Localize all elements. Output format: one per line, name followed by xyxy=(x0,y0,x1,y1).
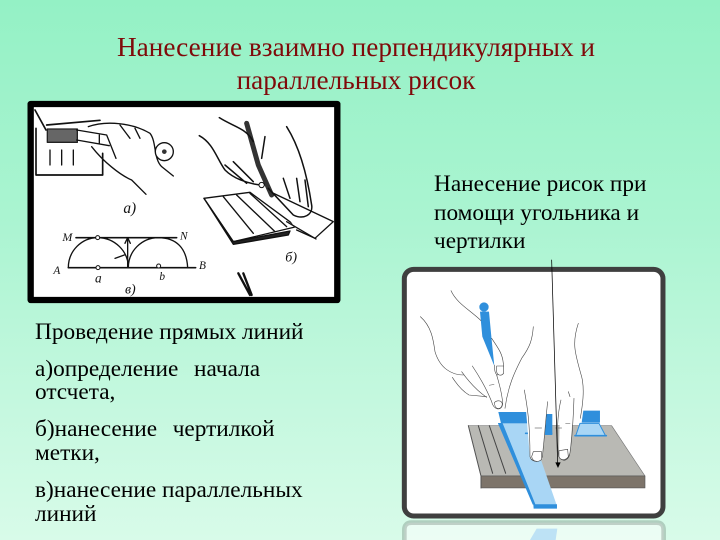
title: параллельных рисок xyxy=(237,65,475,95)
reflected ruler xyxy=(530,529,557,540)
illustration v: geometric construction: в) xyxy=(125,283,136,298)
text: straight line steps: линий xyxy=(35,501,96,527)
rounded frame xyxy=(404,269,663,516)
square tool xyxy=(498,411,606,509)
text: straight line steps: б)нанесение чертилкой xyxy=(35,416,275,442)
illustration v: geometric construction: M xyxy=(61,230,73,244)
illustration v: geometric construction: б) xyxy=(285,251,297,266)
text: scriber caption: помощи угольника и xyxy=(434,200,639,226)
illustration v: geometric construction: N xyxy=(179,231,189,243)
text: straight line steps xyxy=(35,319,304,527)
text: scriber caption xyxy=(434,171,646,254)
illustration a: hand with ruler xyxy=(35,110,173,194)
scriber xyxy=(479,302,494,366)
hands xyxy=(420,291,583,461)
illustration v: geometric construction: а) xyxy=(123,200,136,217)
title xyxy=(117,32,595,95)
text: straight line steps: отсчета, xyxy=(35,379,115,405)
text: scriber caption: Нанесение рисок при xyxy=(434,171,646,197)
text: scriber caption: чертилки xyxy=(434,228,525,254)
text: straight line steps: Проведение прямых линий xyxy=(35,319,304,345)
illustration v: geometric construction: B xyxy=(199,260,206,272)
board xyxy=(468,426,645,488)
illustration b: hands with scriber on board xyxy=(199,118,333,244)
title: Нанесение взаимно перпендикулярных и xyxy=(117,32,595,62)
illustration v: geometric construction: b xyxy=(159,271,165,283)
frame reflection xyxy=(404,523,664,540)
text: straight line steps: метки, xyxy=(35,440,100,466)
text: straight line steps: в)нанесение параллельных xyxy=(35,477,303,503)
text: straight line steps: а)определение начала xyxy=(35,356,260,382)
arrow xyxy=(552,260,561,468)
illustration v: geometric construction: a xyxy=(95,270,102,285)
illustration v: geometric construction xyxy=(52,200,297,298)
illustration v: geometric construction: A xyxy=(52,265,60,277)
